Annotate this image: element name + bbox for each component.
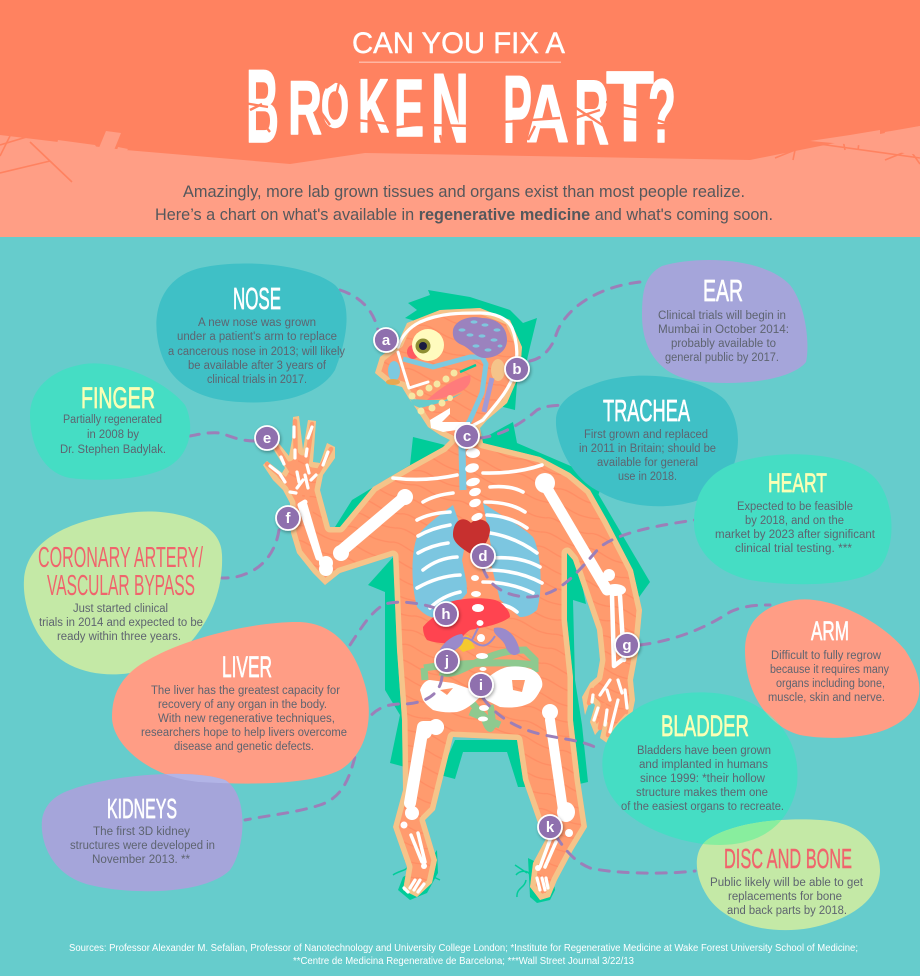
body text: organs including bone, xyxy=(776,678,885,690)
hand and foot bones xyxy=(270,427,627,892)
title: broken part: R xyxy=(288,66,322,151)
face details xyxy=(386,313,517,490)
body text xyxy=(39,603,203,643)
marker c xyxy=(455,424,479,448)
body text: Partially regenerated xyxy=(63,414,162,426)
body text: since 1999: *their hollow xyxy=(640,773,766,785)
heading: BLADDER xyxy=(661,710,749,743)
body text xyxy=(141,685,347,753)
blob xyxy=(42,774,242,891)
marker f xyxy=(276,506,300,530)
body text: November 2013. ** xyxy=(92,854,191,866)
body text: muscle, skin and nerve. xyxy=(768,692,885,704)
body text: and implanted in humans xyxy=(639,759,768,771)
blob xyxy=(30,363,190,480)
joints xyxy=(319,473,626,871)
heading: VASCULAR BYPASS xyxy=(47,570,195,602)
body text: structures were developed in xyxy=(70,840,215,852)
upper face bone xyxy=(398,352,428,388)
title: broken part: K xyxy=(358,64,389,149)
marker k: k xyxy=(546,819,555,836)
tongue sliver xyxy=(460,365,476,372)
dashed leader: e to finger xyxy=(190,433,255,441)
green shadow and hair xyxy=(335,290,650,903)
sources footer: **Centre de Medicina Regenerative de Barcelona; ***Wall Street Journal 3/22/13 xyxy=(293,956,634,967)
body text: researchers hope to help livers overcome xyxy=(141,727,347,739)
human body figure xyxy=(263,290,650,903)
blob xyxy=(745,599,919,738)
dashed leader: f to coronary xyxy=(222,530,279,578)
dashed leader: d to heart xyxy=(483,520,695,597)
dashed leader: c to trachea xyxy=(480,405,562,438)
marker j: j xyxy=(444,653,449,670)
body text: recovery of any organ in the body. xyxy=(158,699,327,711)
body text xyxy=(658,310,789,364)
marker f: f xyxy=(286,510,292,527)
kidneys xyxy=(437,627,520,668)
body text xyxy=(621,745,784,813)
gallbladder xyxy=(455,635,475,652)
eye socket xyxy=(407,345,419,359)
header band xyxy=(0,0,920,237)
body text: The first 3D kidney xyxy=(93,826,190,838)
overlap with arm xyxy=(765,712,780,726)
panel: heart xyxy=(694,454,891,584)
blob xyxy=(602,692,798,845)
title rule xyxy=(359,62,561,63)
title: broken part: ? xyxy=(648,62,676,162)
overlap with liver xyxy=(166,774,230,784)
marker k xyxy=(538,815,562,839)
body text: clinical trials in 2017. xyxy=(207,374,307,386)
body text xyxy=(70,826,215,866)
body text: by 2018, and on the xyxy=(745,515,844,527)
marker a: a xyxy=(382,332,391,349)
dashed leader: i to bladder xyxy=(483,698,600,750)
body text: A new nose was grown xyxy=(198,317,316,329)
nose cartilage xyxy=(388,361,400,381)
dashed leader: k to disc xyxy=(556,836,695,873)
marker e: e xyxy=(263,430,271,447)
teeth xyxy=(408,370,458,414)
heading: TRACHEA xyxy=(603,393,690,428)
marker h: h xyxy=(441,606,451,623)
marker h xyxy=(434,602,458,626)
vertebrae xyxy=(464,448,489,722)
sources footer xyxy=(69,943,858,967)
body text: Difficult to fully regrow xyxy=(771,650,882,662)
heart xyxy=(453,519,490,556)
heading: CORONARY ARTERY/ xyxy=(38,542,204,574)
blob xyxy=(642,260,807,383)
title: broken part: A xyxy=(526,69,569,160)
title: can you fix a: CAN YOU FIX A xyxy=(352,27,565,60)
spine column center xyxy=(462,520,500,600)
title: broken part: O xyxy=(321,72,349,141)
body text: a cancerous nose in 2013; will likely xyxy=(168,346,345,358)
body text: market by 2023 after significant xyxy=(715,529,876,541)
body text: The liver has the greatest capacity for xyxy=(151,685,340,697)
heading xyxy=(38,542,204,602)
body text: structure makes them one xyxy=(636,787,768,799)
body text: use in 2018. xyxy=(618,471,677,483)
body text: Bladders have been grown xyxy=(637,745,771,757)
body text: Expected to be feasible xyxy=(737,501,853,513)
panel: liver xyxy=(112,622,369,784)
body text xyxy=(710,877,864,917)
title: broken part: P xyxy=(503,56,532,163)
marker g xyxy=(615,633,639,657)
marker d: d xyxy=(478,548,488,565)
ear xyxy=(491,359,505,381)
title: broken part: B xyxy=(246,49,279,165)
lungs xyxy=(412,503,541,618)
panel: disc and bone xyxy=(697,819,880,930)
blob xyxy=(697,819,880,930)
mouth gap xyxy=(410,393,462,408)
ribs xyxy=(393,465,542,612)
body text: in 2008 by xyxy=(87,429,139,441)
blob xyxy=(112,622,369,784)
body text: general public by 2017. xyxy=(665,352,779,364)
cracks right xyxy=(775,135,920,164)
body text: disease and genetic defects. xyxy=(174,741,314,753)
dashed leader: h to liver xyxy=(348,602,435,648)
marker d xyxy=(471,544,495,568)
trachea xyxy=(462,430,464,490)
body text: and back parts by 2018. xyxy=(727,905,847,917)
body text: be available after 3 years of xyxy=(188,360,327,372)
panel: nose xyxy=(156,263,347,403)
body text: First grown and replaced xyxy=(584,429,708,441)
body text: Mumbai in October 2014: xyxy=(658,324,789,336)
heading: ARM xyxy=(811,616,849,646)
panel: kidneys xyxy=(42,774,242,891)
blob xyxy=(556,376,738,506)
marker b xyxy=(505,357,529,381)
marker e xyxy=(255,426,279,450)
marker a xyxy=(374,328,398,352)
cracks left xyxy=(0,136,72,182)
arm and leg bones xyxy=(300,485,624,867)
body text: replacements for bone xyxy=(728,891,842,903)
title: broken part: N xyxy=(431,53,469,163)
purple passage xyxy=(484,378,492,412)
body text: With new regenerative techniques, xyxy=(158,713,335,725)
title cracks xyxy=(244,78,672,143)
blob xyxy=(156,263,347,403)
marker b: b xyxy=(512,361,522,378)
title: broken part xyxy=(244,49,676,165)
heading: HEART xyxy=(768,468,827,498)
marker g: g xyxy=(622,637,632,654)
overlap with bladder xyxy=(703,820,782,845)
panel: trachea xyxy=(556,376,738,506)
skin silhouette xyxy=(263,308,642,900)
heading: FINGER xyxy=(81,382,155,415)
panel: arm xyxy=(745,599,919,738)
dashed leader: b to ear xyxy=(530,281,650,361)
intro text: Here’s a chart on what's available in regenerative medicine and what's coming soon. xyxy=(155,205,773,224)
body text xyxy=(579,429,716,483)
body text: available for general xyxy=(597,457,698,469)
airway xyxy=(403,357,486,430)
blob xyxy=(694,454,891,584)
body text: ready within three years. xyxy=(57,631,181,643)
body text xyxy=(715,501,876,555)
panel: finger xyxy=(30,363,190,480)
body text: Dr. Stephen Badylak. xyxy=(60,444,166,456)
body text xyxy=(168,317,345,386)
heading: NOSE xyxy=(233,281,281,316)
liver xyxy=(423,598,510,643)
pelvis xyxy=(420,666,542,712)
panel: ear xyxy=(642,260,807,383)
eye xyxy=(412,329,444,361)
marker i: i xyxy=(479,677,483,694)
intro text xyxy=(155,182,773,224)
body text: Public likely will be able to get xyxy=(710,877,864,889)
marker i xyxy=(469,673,493,697)
cracked shards right xyxy=(810,126,920,155)
dashed leader: g to arm xyxy=(640,605,770,645)
body text xyxy=(768,650,889,704)
jaw xyxy=(430,408,470,432)
heading: KIDNEYS xyxy=(107,793,177,824)
body text: probably available to xyxy=(671,338,776,350)
body text xyxy=(60,414,166,456)
sources footer: Sources: Professor Alexander M. Sefalian, Professor of Nanotechnology and University College London; *Institute for Regenerative Medicine at Wake Forest University School of Medicine; xyxy=(69,943,858,954)
heading: LIVER xyxy=(222,651,272,684)
lip xyxy=(386,379,400,385)
tongue xyxy=(427,375,471,400)
panel: coronary artery xyxy=(24,511,222,674)
finger flesh xyxy=(267,421,626,735)
body text: clinical trial testing. *** xyxy=(735,543,853,555)
panel: bladder xyxy=(602,692,798,844)
body text: Just started clinical xyxy=(73,603,168,615)
title: broken part: R xyxy=(574,62,609,164)
body text: in 2011 in Britain; should be xyxy=(579,443,716,455)
dashed leader: j to kidneys xyxy=(245,677,442,820)
blob xyxy=(24,511,222,674)
title: broken part: E xyxy=(394,63,424,154)
brain xyxy=(453,317,507,358)
cracked shards left xyxy=(55,131,128,160)
marker c: c xyxy=(463,428,471,445)
body text: because it requires many xyxy=(770,664,889,676)
body text: Clinical trials will begin in xyxy=(658,310,786,322)
title: broken part: T xyxy=(606,51,654,163)
dashed leader: a to nose xyxy=(340,290,378,330)
body text: under a patient's arm to replace xyxy=(177,331,337,343)
body text: trials in 2014 and expected to be xyxy=(39,617,203,629)
intestines xyxy=(424,650,535,728)
marker j xyxy=(435,649,459,673)
body text: of the easiest organs to recreate. xyxy=(621,801,784,813)
skull xyxy=(398,313,517,427)
intro text: Amazingly, more lab grown tissues and organs exist than most people realize. xyxy=(183,182,745,201)
heading: EAR xyxy=(703,273,743,308)
